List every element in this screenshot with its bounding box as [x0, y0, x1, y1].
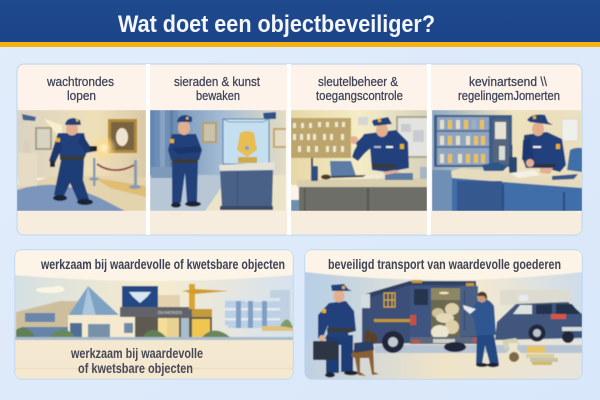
heading: wachtrondes lopen: wachtrondes: [46, 74, 114, 89]
icon: courier with clipboard: [463, 292, 499, 367]
heading: sieraden en kunst bewaken: bewaken: [196, 88, 240, 103]
heading: sleutelbeheer en toegangscontrole: toegangscontrole: [316, 88, 403, 103]
panel: beveiligd transport: [305, 250, 582, 379]
panel: four duties: [17, 64, 582, 235]
icon: guard dog: [351, 329, 379, 376]
text: panel caption: werkzaam bij waardevolle: [70, 345, 203, 361]
text: panel heading: werkzaam bij waardevolle of kwetsbare objecten: [40, 257, 285, 272]
text: panel caption: of kwetsbare objecten: [78, 360, 193, 376]
heading: sieraden en kunst bewaken: sieraden & kunst: [174, 74, 260, 89]
scene: guard at registration desk: [432, 110, 582, 211]
icon: armoured van: [361, 280, 479, 353]
heading: kevinartsend regelingemJomerten: kevinartsend \\: [469, 74, 547, 89]
heading: wachtrondes lopen: [46, 74, 114, 103]
heading: kevinartsend regelingemJomerten: [458, 74, 560, 103]
panel: werkzaam bij waardevolle objecten: [15, 250, 293, 379]
heading: kevinartsend regelingemJomerten: regelingemJomerten: [458, 88, 560, 103]
title: Wat doet een objectbeveiliger?: [118, 11, 435, 38]
scene: guard managing keys at access desk: [291, 110, 427, 211]
heading: sleutelbeheer en toegangscontrole: sleutelbeheer &: [318, 74, 398, 89]
icon: money bags and cash: [502, 338, 558, 368]
text: panel caption: [70, 345, 203, 376]
icon: guard with briefcase: [313, 284, 358, 378]
heading: wachtrondes lopen: lopen: [67, 88, 96, 103]
heading: sleutelbeheer en toegangscontrole: [316, 74, 403, 103]
scene: guard beside jewellery display: [150, 110, 286, 211]
header banner: [0, 0, 600, 47]
heading: sieraden en kunst bewaken: [174, 74, 260, 103]
panel: werkzaam bij waardevolle objecten: DIAMONDS: [158, 310, 182, 315]
scene: guard on patrol in museum: [17, 110, 146, 211]
icon: suv: [495, 295, 582, 343]
